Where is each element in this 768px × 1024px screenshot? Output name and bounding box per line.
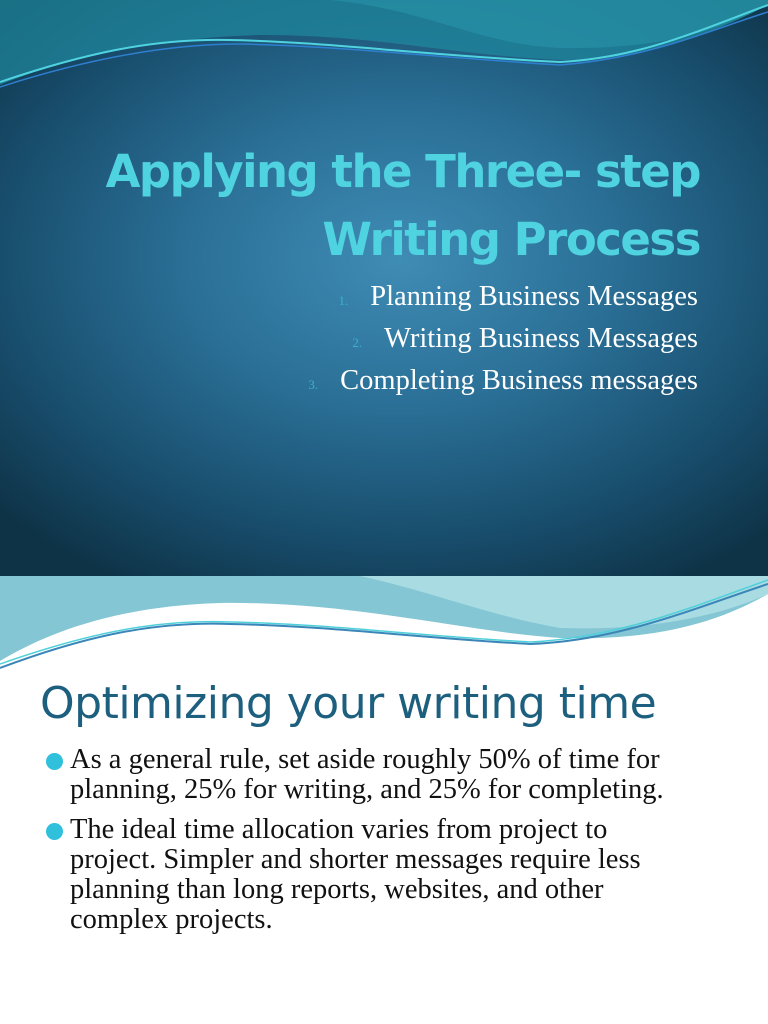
numbered list: 3. Completing Business messages (308, 365, 698, 396)
bullet 1: As a general rule, set aside roughly 50% of time for (70, 744, 660, 775)
panel: title slide (0, 0, 768, 576)
title (106, 145, 700, 266)
panel: optimizing slide (0, 576, 768, 1024)
numbered list: 2. Writing Business Messages (352, 323, 698, 354)
bottom wave (0, 576, 768, 669)
bullet 2 (46, 814, 641, 935)
numbered list (308, 281, 698, 396)
title: Applying the Three- step (106, 145, 700, 198)
bullet 2: The ideal time allocation varies from project to (70, 814, 607, 845)
top wave (0, 0, 768, 88)
bullet 1 (46, 744, 664, 805)
bullet 1: planning, 25% for writing, and 25% for completing. (70, 774, 664, 805)
bullet 2: complex projects. (70, 904, 273, 935)
heading: Optimizing your writing time (40, 678, 656, 729)
title: Writing Process (322, 213, 700, 266)
bullet 2: planning than long reports, websites, and other (70, 874, 603, 905)
bullet 2: project. Simpler and shorter messages require less (70, 844, 641, 875)
numbered list: 1. Planning Business Messages (338, 281, 698, 312)
